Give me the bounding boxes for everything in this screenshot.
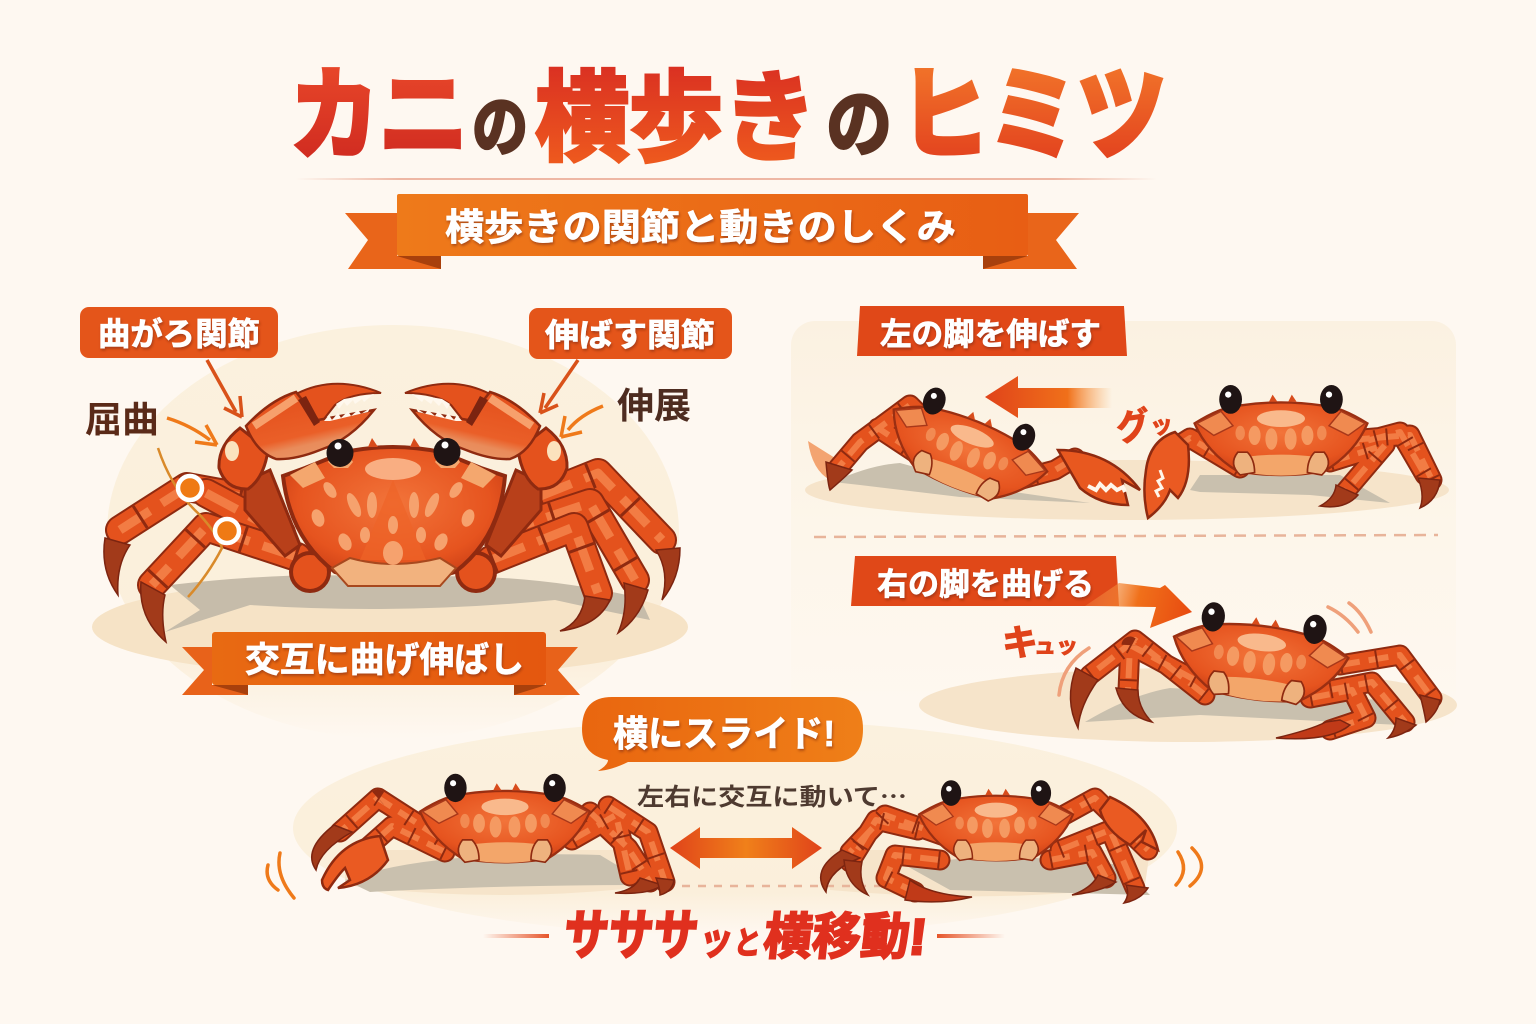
motion lines: bottom crab: [1059, 603, 1371, 695]
arrow: bending joint: [207, 360, 242, 417]
slogan: 横移動: [761, 909, 913, 965]
shadows: [833, 463, 1400, 725]
slogan: ッ: [697, 919, 736, 963]
dashed ground line: [650, 885, 880, 887]
title: 横歩き: [535, 63, 817, 173]
claw: [1100, 797, 1158, 850]
leg base joints: [245, 470, 541, 591]
onomatopoeia: kyu: ュッ: [1034, 635, 1078, 658]
left claw: [219, 384, 381, 489]
onomatopoeia: guh: [1113, 401, 1176, 449]
subtitle ribbon: 横歩きの関節と動きのしくみ: [445, 207, 956, 248]
decorative slogan lines: [483, 934, 1005, 938]
heading: bend right leg: [851, 556, 1119, 606]
title: の: [826, 83, 892, 166]
label: extending joint: [529, 308, 732, 359]
heading: stretch left leg: [857, 306, 1127, 356]
crab legs: [104, 473, 680, 642]
onomatopoeia: kyu: キ: [1002, 622, 1038, 663]
crab: slide left: [312, 774, 674, 895]
arrow: extension: [561, 406, 603, 437]
speech bubble: 横にスライド!: [613, 713, 835, 754]
sand top: [805, 460, 1449, 520]
label: extending joint: 伸ばす関節: [545, 317, 715, 353]
panel: right side: [791, 321, 1457, 742]
main crab: [104, 384, 680, 642]
motion lines: right: [1176, 848, 1202, 886]
slogan: [561, 906, 930, 966]
title: カニ: [290, 60, 468, 172]
crab: top right: [1144, 385, 1440, 518]
panel: slide oval: [293, 720, 1177, 936]
title: ヒミツ: [900, 60, 1166, 172]
motion wedge: [808, 441, 835, 480]
heading: stretch left leg: 左の脚を伸ばす: [880, 317, 1101, 352]
arrow: left: [985, 376, 1112, 418]
sand bottom: [919, 668, 1457, 742]
subtitle ribbon: [345, 194, 1079, 269]
double arrow: [670, 827, 822, 869]
eyes: [326, 438, 460, 468]
onomatopoeia: kyu: [1002, 622, 1078, 663]
claw: [1058, 450, 1140, 505]
label: flexion: 屈曲: [85, 399, 159, 440]
ribbon: alternate bend and stretch: 交互に曲げ伸ばし: [245, 641, 524, 680]
label: extension: 伸展: [617, 385, 691, 426]
slogan: と: [732, 925, 763, 961]
label: bending joint: 曲がろ関節: [98, 316, 260, 352]
title divider: [296, 178, 1157, 180]
motion lines: left: [267, 853, 294, 898]
label: bending joint: [80, 307, 278, 358]
panel: main crab backdrop: [92, 325, 688, 739]
carapace: [283, 438, 505, 586]
arrow: right: [1085, 583, 1192, 628]
claw: [322, 836, 388, 890]
arrow: extending joint: [540, 360, 578, 413]
caption: moving alternately: 左右に交互に動いて …: [637, 777, 907, 812]
slogan: !: [907, 909, 929, 965]
claw: [1144, 432, 1189, 518]
joint markers: [158, 448, 239, 597]
speech bubble: [582, 697, 863, 771]
onomatopoeia: guh: グ: [1113, 404, 1153, 449]
right claw: [405, 384, 567, 489]
dashed divider: [814, 535, 1438, 537]
crab: bending right: [1070, 598, 1440, 739]
onomatopoeia: guh: ッ: [1149, 411, 1175, 439]
heading: bend right leg: 右の脚を曲げる: [877, 567, 1094, 602]
ribbon: alternate bend and stretch: [182, 632, 580, 695]
crab: leaning left: [826, 375, 1140, 518]
arrow: flexion: [167, 418, 217, 445]
slogan: サササ: [561, 906, 701, 966]
title: の: [472, 90, 528, 164]
crab: slide right: [821, 780, 1158, 903]
title: [290, 60, 1166, 173]
